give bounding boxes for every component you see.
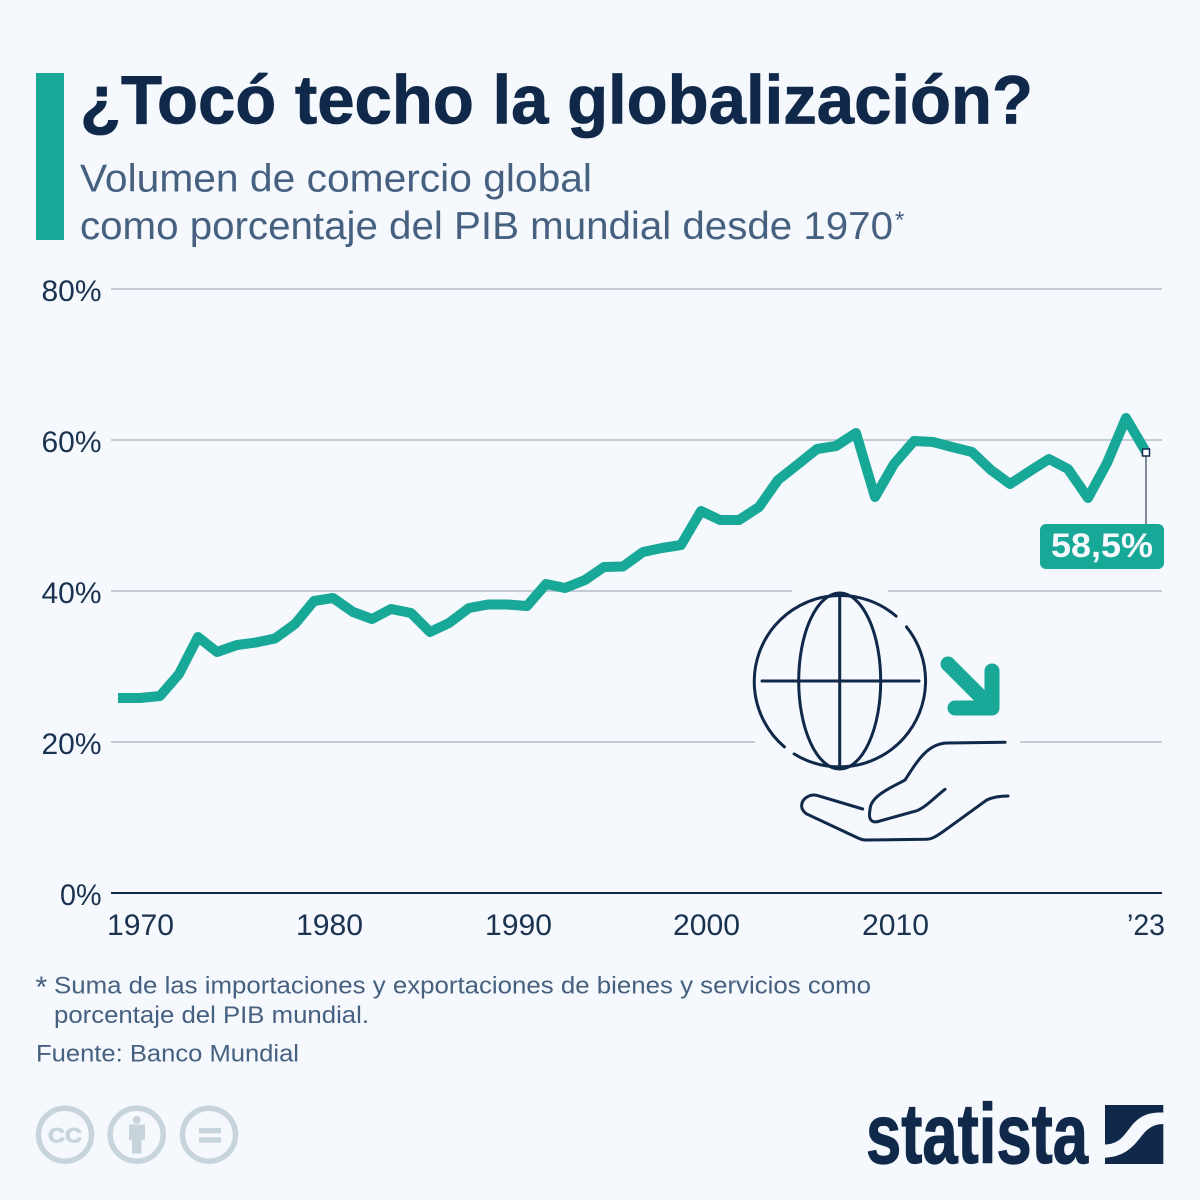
icon: hand [802, 742, 1008, 840]
source: Fuente: Banco Mundial [36, 1040, 299, 1068]
subtitle: Volumen de comercio global [80, 158, 592, 200]
y axis labels: 0% [60, 879, 102, 912]
statista wordmark: statista [866, 1087, 1089, 1181]
subtitle [80, 158, 904, 248]
y axis labels: 80% [42, 275, 102, 308]
x axis labels: 1990 [485, 909, 552, 942]
subtitle: * [895, 207, 904, 234]
subtitle: como porcentaje del PIB mundial desde 1970 [80, 205, 893, 248]
callout: 58,5% [1040, 449, 1164, 569]
x axis line [111, 892, 1162, 894]
icon: attribution [110, 1108, 163, 1161]
footnote: porcentaje del PIB mundial. [54, 1002, 369, 1029]
x axis labels: 1980 [296, 909, 363, 942]
y axis labels: 40% [42, 577, 102, 610]
x axis labels: 2010 [862, 909, 929, 942]
statista logo mark [1105, 1105, 1163, 1164]
title: ¿Tocó techo la globalización? [80, 62, 1033, 138]
gridlines [111, 289, 1162, 742]
icon: arrow down-right [948, 664, 992, 708]
x axis labels [107, 909, 1165, 942]
x axis labels: 2000 [673, 909, 740, 942]
icon: globe on hand with downward arrow [754, 593, 1008, 840]
icon: no derivatives [182, 1108, 236, 1161]
footnote: Suma de las importaciones y exportaciones de bienes y servicios como [54, 972, 871, 1000]
footnote: * [36, 971, 48, 1004]
y axis labels [42, 275, 102, 912]
y axis labels: 20% [42, 728, 102, 761]
icon: globe [754, 593, 926, 769]
x axis labels: ’23 [1127, 909, 1165, 942]
callout: 58,5%: 58,5% [1051, 527, 1153, 565]
icon: creative commons: CC [48, 1124, 82, 1148]
footnote [36, 971, 871, 1029]
accent bar [36, 73, 64, 240]
line chart: trade as share of world GDP [118, 418, 1146, 698]
x axis labels: 1970 [107, 909, 174, 942]
y axis labels: 60% [42, 426, 102, 459]
icon: creative commons [38, 1108, 92, 1161]
